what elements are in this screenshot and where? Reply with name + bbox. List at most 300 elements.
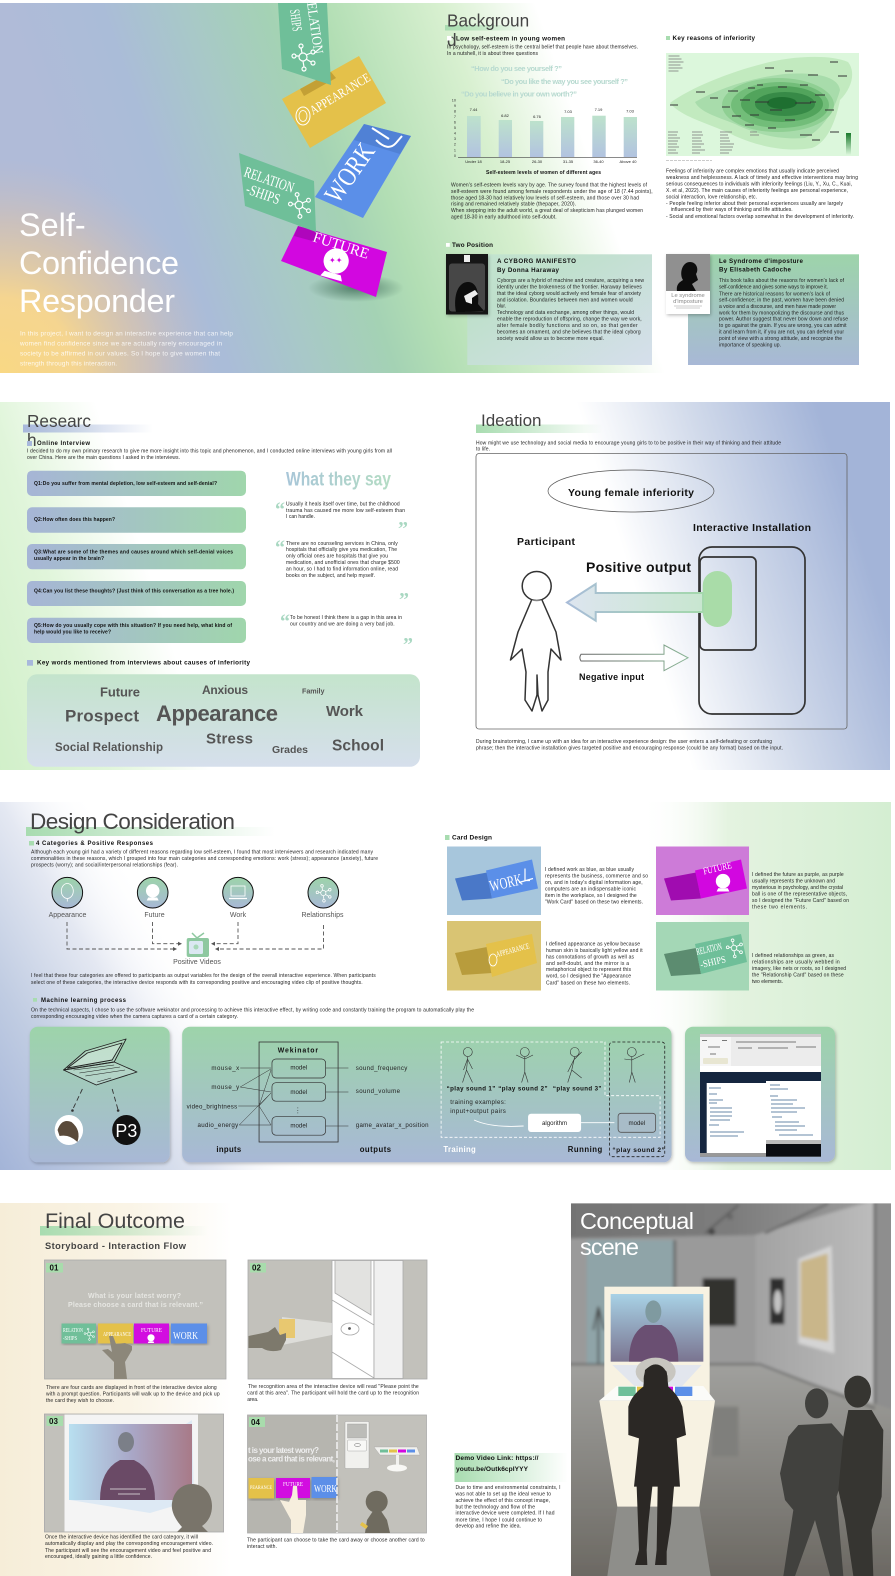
storyboard 02 caption: The recognition area of the interactive device will read "Please point the [248,1384,419,1390]
icon: positive videos tv [187,933,209,957]
icon: laptop [64,1039,137,1085]
panel: cyborg manifesto: alter female bodily functions and so on, so that gender [497,323,638,329]
section: low self-esteem text: In psychology, self-esteem is the central belief that people have about themselves. [447,44,638,50]
demo video link [454,1453,568,1482]
four cards: WORK [173,1330,198,1342]
arrow: negative input [580,645,688,671]
word cloud panel: Appearance [156,701,278,726]
category: future [137,877,168,919]
cream hand [280,1486,306,1533]
card mockup: work [447,846,541,915]
card text: appearance: metaphorical object to represent this [546,967,632,973]
three questions: “Do you believe in your own worth?” [461,90,577,98]
paragraph: survey findings: When stepping into the adult world, a great deal of skepticism has plunged women [451,208,643,214]
ellipse: young female inferiority [548,470,714,512]
training note: input+output pairs [450,1108,506,1115]
panel: le syndrome d'imposture: There are historical reasons for women's lack of [719,291,831,297]
bar chart: self-esteem by age: Above 40 [620,159,637,164]
heading: two position: Two Position [452,242,493,249]
quote 2: medication, and unofficial ones that charge $500 [286,560,400,566]
quote 2: an hour, so I had to find information online, read [286,566,398,572]
paragraph: feelings of inferiority: - People feeling inferior about their personal experiences usually are largely [666,201,844,207]
training labels: “play sound 3” [553,1086,602,1093]
card text: future: mysterious in psychology, and the crystal [752,885,843,891]
bar chart: self-esteem by age: 18-25 [500,159,511,164]
storyboard 03 caption: encouraged, ideally gaining a little confidence. [45,1554,152,1560]
paragraph: survey findings: aged 18-30 in early adulthood into self-doubt. [451,215,557,221]
note on constraints: develop and refine the idea. [456,1524,521,1530]
quote 3: “ [280,611,290,633]
section: online interview intro: I decided to do my own primary research to give me more insight into this topic and phenomenon, and I conducted online interviews with young girls from all [27,448,392,454]
section: online interview intro: Online Interview [37,441,90,447]
note on constraints: was not able to set up the ideal venue to [456,1491,551,1497]
panel: laptop and software [30,1027,170,1162]
heading: research: Researc [27,411,91,431]
conceptual scene image [565,1197,895,1576]
panel: cyborg manifesto: Cyborgs are a hybrid of machine and creature, acquiring a new [497,278,644,284]
density map [666,53,859,160]
category: relationships [301,877,344,919]
heading: key words: Key words mentioned from interviews about causes of inferiority [37,660,250,666]
card: work: WORK [318,137,381,208]
panel: cyborg manifesto: By Donna Haraway [497,267,560,274]
bar chart: self-esteem by age: 7.03 [626,108,635,114]
note on constraints: Due to time and environmental constraints, I [456,1485,560,1491]
running zone outline [609,1042,665,1157]
screenshot [700,1034,821,1157]
bar chart: self-esteem by age: 31-35 [563,159,574,164]
storyboard 04: t is your latest worry? [248,1446,319,1455]
heading: ideation [476,411,603,433]
ideation diagram [476,454,847,729]
subheading: storyboard: Storyboard - Interaction Flow [45,1241,187,1251]
icon: wekinator logo [55,1115,83,1145]
word cloud panel: Grades [272,744,308,756]
badge 03: 03 [49,1417,58,1426]
outputs: sound_volume [356,1088,401,1095]
card text: future: so I designed the "Future Card" based on [752,898,849,904]
card: relationships lower [239,153,316,232]
storyboard 04 [248,1415,426,1533]
quote 3: our country and we are doing a very bad job. [290,622,395,628]
inputs: mouse_x [211,1065,240,1072]
bar chart: self-esteem by age: 3 [454,137,456,141]
word cloud panel: Family [302,686,324,695]
panel: cyborg manifesto: Technology and data exchange, among other things, would [497,310,634,316]
gallery room backdrop [565,1197,895,1576]
card text: relationships: the "Relationship Card" based on these [752,973,844,979]
paragraph: survey findings: rising and remained relatively stable (thepaper, 2020). [451,202,576,208]
paragraph: survey findings: those aged 18-30 had relatively low levels of self-esteem, and those over 30 had [451,195,639,201]
panel: le syndrome d'imposture: Le Syndrome d'imposture [719,258,804,265]
panel: le syndrome d'imposture: point of view with a strong attitude, and recognize the [719,336,842,342]
panel: wekinator diagram [182,1027,671,1162]
card text: appearance: and self-doubt, and the mirror is a [546,961,629,967]
kiosk [345,1422,369,1468]
card: relationships top: ELATION [303,1,325,55]
paragraph: output variables: select one of these categories, the interactive device responds with its corresponding positive and encouraging video clip of positive thoughts. [31,980,363,986]
panel: cyborg manifesto: society would allow us to become more equal. [497,336,604,342]
quote 2: only official ones are hospitals that give you [286,554,388,560]
bar chart: self-esteem by age: 6 [454,120,456,124]
word cloud panel: Work [326,703,364,720]
four cards: FUTURE [141,1328,162,1334]
card text: future: these two elements. [752,904,807,910]
training labels [447,1086,602,1093]
visitor silhouette right [838,1376,883,1576]
intro text: society to be affirmed in our values. So I hope to give women that [20,350,220,358]
card shadow [308,274,404,302]
ideation description [476,739,783,752]
section: online interview intro [27,441,392,461]
four cards: RELATION [63,1328,83,1334]
bar chart: self-esteem by age: 6.82 [501,113,510,118]
panel: le syndrome d'imposture: importance of speaking up. [719,342,781,348]
card text: future: ball is one of the representative objects, [752,891,847,897]
wekinator box: model [290,1089,307,1096]
heading: conceptual scene: Conceptual [580,1208,694,1234]
connector arrowheads [173,942,219,951]
card text: work: item in the workplace, so I designed the [545,893,637,899]
heading: what they say: What they say [286,470,391,490]
question 2: Q2:How often does this happen? [34,517,115,523]
card text: appearance: has connotations of growth as well as [546,954,634,960]
card text: work: "Work Card" based on these two elements. [545,900,643,906]
storyboard 03 [44,1414,224,1532]
note on constraints: achieve the effect of this concept image, [456,1498,550,1504]
word cloud panel: Future [100,685,140,700]
wekinator box [259,1042,338,1142]
heading: research [23,411,153,450]
cards close-up: WORK [314,1483,337,1495]
video still [69,1424,192,1500]
heading: background [445,10,529,50]
quote 3 [280,611,413,656]
paragraph: feelings of inferiority [666,168,858,220]
training labels: “play sound 1” [447,1086,495,1093]
icon: processing logo: P3 [115,1121,137,1141]
dashed connectors [67,922,324,949]
quote 2: ” [399,589,409,611]
training zone outline [441,1042,660,1137]
storyboard 01 caption: There are four cards are displayed in front of the interactive device along [46,1385,217,1391]
section: low self-esteem text [447,36,638,57]
section: 4 categories [29,841,378,868]
quote 3: To be honest I think there is a gap in this area in [290,615,402,621]
background: final outcome band [0,1203,232,1576]
cards close-up: FUTURE [283,1482,303,1488]
bar chart: self-esteem by age: 10 [452,98,456,102]
storyboard 02 caption: card at this area". The participant will hold the card up to the recognition [247,1390,419,1396]
badge 02: 02 [252,1264,261,1272]
card text: future: I defined the future as purple, as purple [752,872,844,878]
card text: relationships: imagery, like nets or roots, so I designed [752,966,846,972]
paragraph: output variables [31,973,376,986]
card text: work: on, and in today's digital information age, [545,880,643,886]
demo video link: youtu.be/Outk6cpIYYY [456,1466,529,1473]
falling cards illustration [239,1,411,302]
paragraph: survey findings [451,182,653,221]
participant figure [360,1491,390,1533]
category flow diagram [49,877,344,966]
card text: appearance: I defined appearance as yellow because [546,942,640,948]
card text: relationships [752,953,846,985]
heading: background: d [447,30,457,50]
four cards [62,1324,207,1344]
quote 1 [275,499,408,540]
quote 2: “ [275,537,285,559]
card text: appearance [546,942,643,986]
question 5: Q5:How do you usually cope with this situation? If you need help, what kind of [34,623,232,629]
card mockup: relationships [656,922,749,990]
section: 4 categories: prospects (worry); and social/interpersonal relationships (fear). [31,862,178,868]
heading: research: h [27,430,37,450]
category: appearance: Appearance [49,912,86,919]
panel: le syndrome d'imposture: to go against the grain. If you are wrong, you can admit [719,323,847,329]
storyboard 03 caption: automatically display and play the corresponding encouragement video. [45,1541,213,1547]
paragraph: feelings of inferiority: social interaction, love relationship, etc. [666,194,757,200]
card: relationships top [278,1,331,85]
card text: work: I defined work as blue, as blue usually [545,867,634,873]
panel: code screenshot [685,1027,835,1162]
category: work [223,877,253,919]
title: Responder [19,283,175,319]
storyboard 02 [248,1260,427,1379]
bar chart: self-esteem by age: 5 [454,126,456,130]
badge 01 [46,1263,63,1272]
storyboard 01 caption: the card they wish to choose. [46,1398,114,1404]
storyboard 03 caption [45,1534,213,1560]
bar chart: self-esteem by age: 8 [454,109,456,113]
label: participant: Participant [517,536,576,548]
ideation question: to life. [476,446,490,452]
note on constraints: interactive device were completed. If I had [456,1511,555,1517]
card text: work [545,867,648,906]
background: research and ideation band [0,402,890,770]
section: machine learning text: On the technical aspects, I chose to use the software wekinator and processing to achieve this interactive effect, by writing code and constantly training the program to automatically play the [31,1008,474,1014]
algorithm box [528,1114,581,1132]
book cover: le syndrome [666,254,710,314]
storyboard 04: ose a card that is relevant, [248,1454,335,1464]
quote 1: Usually it heals itself over time, but the childhood [286,502,400,508]
question 3 [27,544,246,569]
panel: cyborg manifesto: that the ideal cyborg would actively end female fear of anxiety [497,291,642,297]
installation device [699,547,805,714]
bar chart: self-esteem by age: 0 [454,154,456,158]
quote 1: trauma has caused me more low self-esteem than [286,508,405,514]
card mockup: relationships: RELATION [695,941,723,958]
card text: work: computers are an indispensable iconic [545,886,636,892]
storyboard 01 [44,1260,226,1379]
recognition beam [282,1317,332,1345]
storyboard 04 caption: interact with. [247,1544,277,1550]
card mockup: appearance [447,921,541,990]
dashed links [72,1089,118,1110]
panel: cyborg manifesto: becomes an ornament, and she believes that the ideal cyborg [497,329,641,335]
note on constraints: but the technology and flow of the [456,1504,535,1510]
paragraph: feelings of inferiority: - Social and emotional factors overlap somewhat in the development of inferiority. [666,214,854,220]
card text: relationships: two elements. [752,979,783,985]
inputs [187,1065,240,1129]
word cloud panel: School [332,738,384,755]
inputs: audio_energy [198,1122,239,1129]
outputs: sound_frequency [356,1065,408,1072]
demo video link: Demo Video Link: https:// [456,1455,539,1462]
column labels: outputs [360,1145,391,1154]
question 4: Q4:Can you list these thoughts? (Just think of this conversation as a tree hole.) [34,588,234,594]
cards close-up: PEARANCE [250,1485,272,1491]
outputs [356,1065,429,1129]
column labels: Running [568,1145,602,1154]
card held [279,1319,295,1338]
ideation question: How might we use technology and social media to encourage young girls to to be positive in their way of thinking and their attitude [476,441,781,447]
heading: design consideration: Design Consideration [30,809,235,834]
table with cards [374,1447,420,1472]
section: machine learning text [31,998,474,1020]
question 1: Q1:Do you suffer from mental depletion, low self-esteem and self-denial? [34,481,217,487]
background: project intro band [0,3,891,373]
bar chart: self-esteem by age: 26-30 [532,159,543,164]
heading: conceptual scene: scene [580,1234,639,1260]
bar chart: self-esteem by age: 7.03 [564,109,573,114]
three questions: “How do you see yourself ?” [471,64,562,73]
paragraph: feelings of inferiority: Feelings of inferiority are complex emotions that usually indicate perceived [666,168,839,174]
card: appearance: APPEARANCE [307,70,373,118]
arrow: positive output [567,584,703,621]
label: positive output: Positive output [586,559,691,575]
trained model box: model [628,1120,645,1127]
intro text: women find confidence since we are actually rarely encouraged in [19,340,222,348]
paragraph: feelings of inferiority: weakness and helplessness. A lack of timely and effective interventions may bring [666,175,858,181]
heading: ideation: Ideation [481,411,542,430]
viewer silhouette [172,1484,212,1532]
book cover: cyborg manifesto [446,254,488,314]
ellipse: young female inferiority: Young female inferiority [568,487,694,499]
trained model box [618,1113,656,1132]
card text: work: represents the business, commerce and so [545,874,648,880]
participant figure [510,572,561,711]
bar chart: self-esteem by age: 6.76 [533,114,542,119]
storyboard 01: Please choose a card that is relevant.” [68,1302,203,1309]
badge 03 [46,1416,63,1426]
hand holding card [248,1327,286,1351]
visitor silhouette left [780,1388,843,1576]
storyboard 01: What is your latest worry? [88,1293,181,1300]
bar chart: self-esteem by age: 7.44 [470,107,478,112]
heading: background: Backgroun [447,10,529,30]
question 5 [27,618,246,643]
panel: cyborg manifesto: blur. [497,304,506,310]
three questions [461,64,628,98]
four cards: APPEARANCE [103,1332,131,1338]
word cloud panel [27,674,420,767]
section: low self-esteem text: In a nutshell, it is about three questions [447,51,538,57]
card: relationships top: SHIPS [286,8,304,32]
badge 01: 01 [50,1264,59,1272]
panel: cyborg manifesto: enable the reproduction of offspring, change the way we work, [497,317,642,323]
four cards: -SHIPS [63,1336,77,1342]
card text: relationships: relationships are usually webbed in [752,959,840,965]
label: positive videos: Positive Videos [173,959,221,966]
panel: cyborg manifesto: and isolation. Boundaries between men and women would [497,297,633,303]
paragraph: survey findings: Women's self-esteem levels vary by age. The survey found that the highest levels of [451,182,648,188]
book cover: le syndrome: d'imposture [673,299,703,305]
bar chart: self-esteem by age: 1 [454,148,456,152]
question 3: Q3:What are some of the themes and causes around which self-denial voices [34,550,233,556]
intro text [19,330,233,368]
badge 04 [249,1417,265,1427]
panel: le syndrome d'imposture [666,254,859,365]
heading: key reasons: Key reasons of inferiority [672,35,755,42]
quote 2: There are no counseling services in China, only [286,541,398,547]
section: online interview intro: over China. Here are the main questions I asked in the interviews. [27,455,180,461]
storyboard 04 caption: The participant can choose to take the card away or choose another card to [247,1538,425,1544]
card text: appearance: word, so I designed the "Appearance [546,974,631,980]
panel: le syndrome d'imposture: a voice and a discourse, and men have made power [719,304,836,310]
wekinator box: model [290,1064,307,1072]
panel: le syndrome d'imposture: This book talks about the reasons for women's lack of [719,278,845,284]
question 1 [27,471,246,496]
label: negative input: Negative input [579,672,644,682]
device side view [332,1260,403,1378]
note on constraints [456,1485,560,1530]
bar chart: self-esteem by age: 7.19 [595,107,603,112]
input lines [238,1068,271,1125]
paragraph: feelings of inferiority: X. et al, 2022). The main causes of inferiority feelings are personal experience, [666,188,848,194]
bar chart: self-esteem by age: Under 18 [465,159,482,164]
panel: cyborg manifesto: A CYBORG MANIFESTO [497,258,576,265]
title [19,207,179,319]
question 5: help would you like to receive? [34,630,111,636]
hand pointing [102,1336,132,1379]
category: work: Work [230,912,247,919]
word cloud panel: Anxious [202,683,248,697]
section: low self-esteem text: Low self-esteem in young women [456,36,565,42]
cards close-up [248,1477,337,1498]
card: relationships lower: RELATION [242,165,296,197]
paragraph: survey findings: self-esteem were found among female respondents under the age of 18 (7.44 points), [451,189,653,195]
intro text: strength through this interaction. [20,360,117,368]
card text: future: usually represents the unknown and [752,878,835,884]
storyboard 01 caption [46,1385,220,1404]
training note: training examples: [450,1099,506,1106]
section: machine learning text: Machine learning process [41,998,127,1004]
panel: le syndrome d'imposture: it and learn from it, if you are not, you can defend your [719,329,844,335]
paragraph: output variables: I feel that these four categories are offered to participants as output variables for the design of the overall interactive experience. When participants [31,973,376,979]
column labels: Training [443,1145,476,1154]
panel: le syndrome d'imposture: work for them by monopolizing the discourse and thus [719,310,844,316]
card mockup: future [656,846,749,915]
stick figures [463,1048,644,1082]
heading: final outcome: Final Outcome [45,1209,185,1233]
storyboard 03 caption: The participant will see the encouragement video and feel positive and [45,1548,211,1554]
quote 2 [275,537,409,611]
storyboard 02 caption [247,1384,419,1403]
card text: relationships: I defined relationships as green, as [752,953,834,959]
quote 1: ” [398,518,408,540]
ideation description: During brainstorming, I came up with an idea for an interactive experience design: the user enters a self-defeating or confusing [476,739,772,745]
storyboard 03 caption: Once the interactive device has identified the card category, it will [45,1534,198,1540]
word cloud panel: Stress [206,731,253,748]
bar chart: self-esteem by age: 7 [454,115,456,119]
panel: cyborg manifesto: identity under the brokenness of the frontier. Haraway believes [497,285,642,291]
note on constraints: more time, I hope I could continue to [456,1517,542,1523]
quote 3: ” [403,634,413,656]
card: future: ✦✦ [329,256,343,265]
card mockup: future: FUTURE [702,860,733,877]
card mockup: appearance: APPEARANCE [495,941,530,959]
panel: cyborg manifesto [446,254,652,365]
